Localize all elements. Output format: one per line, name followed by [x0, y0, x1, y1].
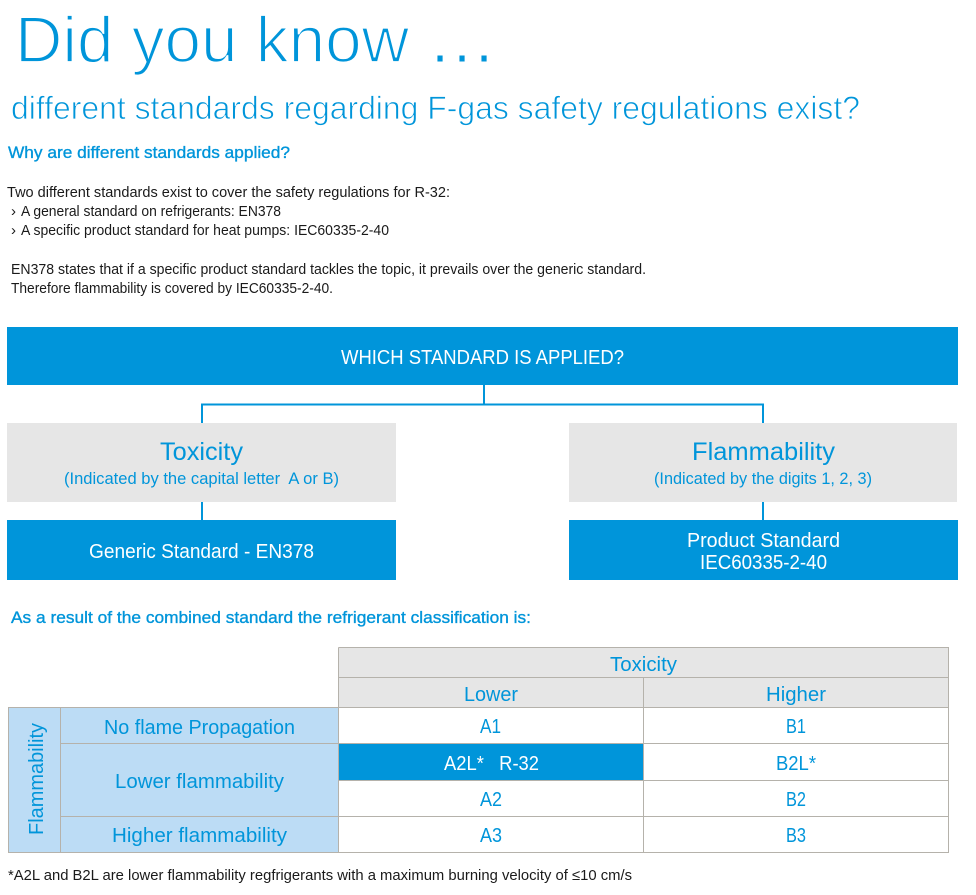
table cells: classes: B1 [786, 716, 806, 738]
panel: toxicity: (Indicated by the capital letter A or B) [64, 470, 339, 488]
table header: toxicity [338, 648, 948, 708]
panel: product standard: Product Standard [687, 530, 840, 552]
text block: EN378 precedence [11, 261, 646, 297]
text block: EN378 precedence: EN378 states that if a specific product standard tackles the topic, it prevails over the generic standard. [11, 261, 646, 278]
highlighted cell: A2L R-32: A2L* R-32 [444, 753, 539, 775]
arrow: tree connector [202, 385, 763, 520]
panel: toxicity [7, 423, 396, 502]
table cells: classes: A3 [480, 825, 502, 847]
table header: toxicity: Lower [464, 684, 518, 706]
panel: flammability [569, 423, 957, 502]
heading: classification result: As a result of the combined standard the refrigerant classification is: [11, 608, 531, 627]
panel: product standard [569, 520, 958, 580]
table row headers: flammability: Flammability [26, 723, 48, 835]
table cells: classes: B2L* [776, 753, 816, 775]
panel: flammability: Flammability [692, 438, 836, 466]
footnote: *A2L and B2L are lower flammability regfrigerants with a maximum burning velocity of ≤10 cm/s [8, 867, 632, 884]
panel: which standard banner: WHICH STANDARD IS APPLIED? [341, 347, 624, 369]
table grid lines [8, 648, 948, 852]
table cells: classes: A1 [480, 716, 501, 738]
table cells: classes: A2 [480, 789, 502, 811]
table: refrigerant classification [8, 648, 948, 852]
panel: generic standard [7, 520, 396, 580]
table row headers: flammability: Lower flammability [115, 771, 284, 793]
text block: two standards: A general standard on refrigerants: EN378 [21, 203, 281, 220]
table row headers: flammability: Higher flammability [112, 825, 287, 847]
table cells: classes [480, 716, 816, 847]
table header: toxicity: Toxicity [610, 654, 677, 676]
table cells: classes: B3 [786, 825, 806, 847]
panel: generic standard: Generic Standard - EN378 [89, 541, 314, 563]
text block: two standards: › [11, 203, 16, 220]
panel: flammability: (Indicated by the digits 1, 2, 3) [654, 470, 872, 488]
title: Did you know [15, 3, 410, 76]
table row headers: flammability: No flame Propagation [104, 717, 295, 739]
panel: product standard: IEC60335-2-40 [700, 552, 827, 574]
text block: two standards: › [11, 222, 16, 239]
table cells: classes: B2 [786, 789, 806, 811]
text block: EN378 precedence: Therefore flammability is covered by IEC60335-2-40. [11, 280, 333, 297]
text block: two standards [7, 184, 450, 239]
highlighted cell: A2L R-32 [338, 744, 644, 780]
table header: toxicity: Higher [766, 684, 826, 706]
text block: two standards: A specific product standard for heat pumps: IEC60335-2-40 [21, 222, 389, 239]
subtitle: different standards regarding F-gas safety regulations exist? [11, 90, 860, 126]
table row headers: flammability [8, 708, 338, 852]
text block: two standards: Two different standards exist to cover the safety regulations for R-32: [7, 184, 450, 201]
heading: why different standards: Why are different standards applied? [8, 143, 290, 162]
panel: which standard banner [7, 327, 958, 385]
title: ... [431, 3, 493, 76]
panel: toxicity: Toxicity [160, 438, 243, 466]
